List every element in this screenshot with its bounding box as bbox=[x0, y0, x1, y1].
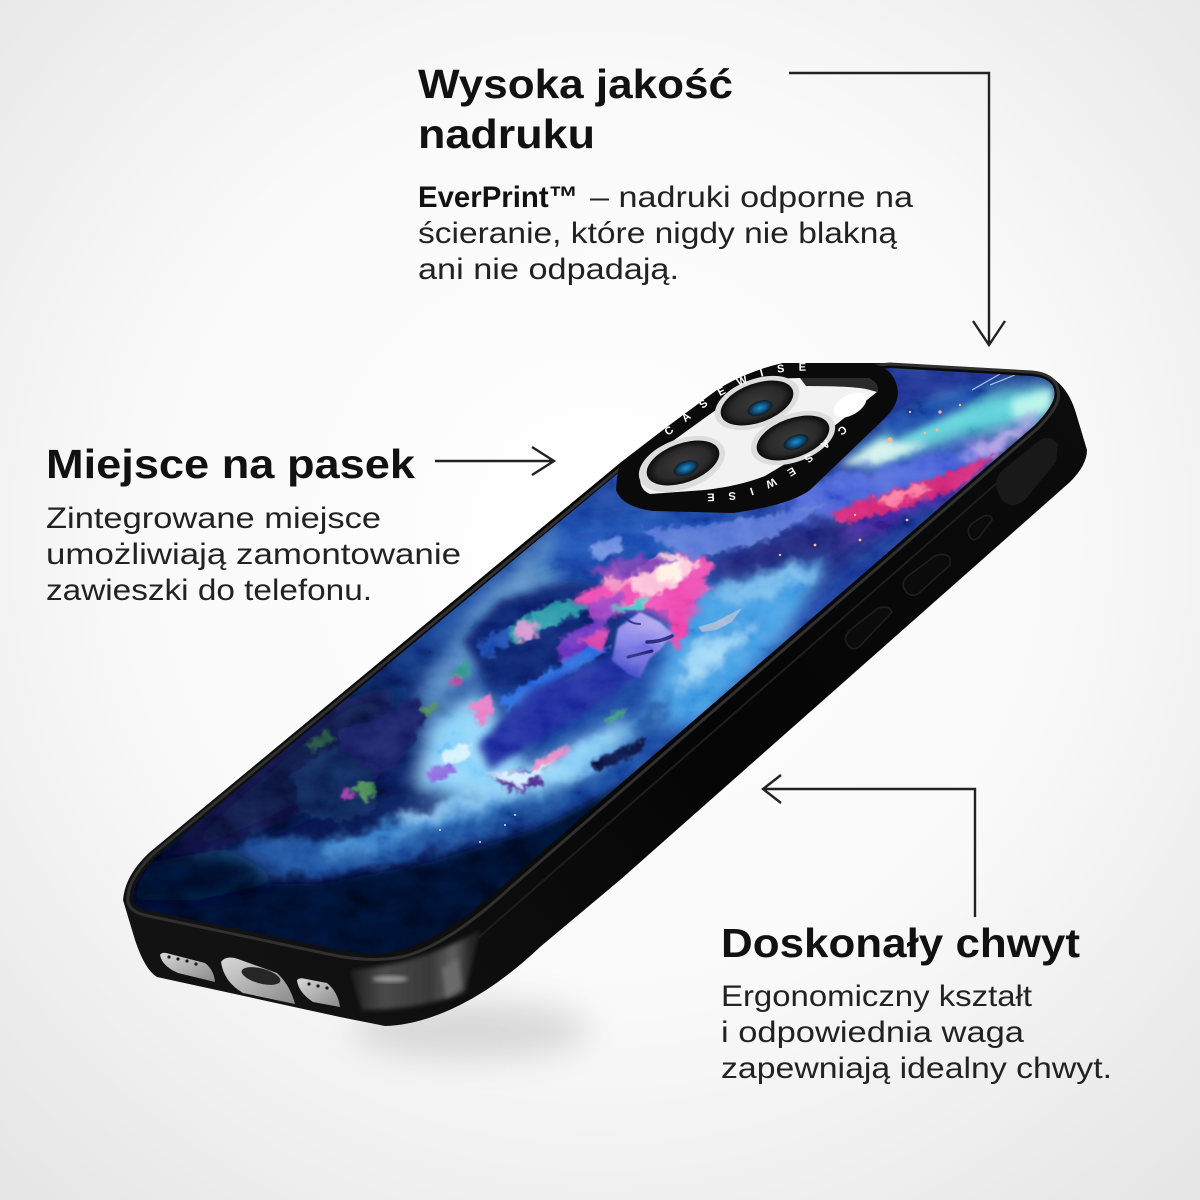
rim lettering: CASEWISE bbox=[665, 363, 806, 434]
rim lettering lower: CASEWISE bbox=[708, 426, 846, 502]
neck and shoulder bbox=[478, 655, 636, 770]
side buttons bbox=[845, 516, 992, 649]
inner top shade bbox=[800, 378, 878, 392]
dark rock formations bbox=[290, 696, 647, 822]
screen rim bbox=[128, 364, 1058, 959]
heading: print quality: nadruku bbox=[418, 111, 595, 157]
dark bottom left corner bbox=[130, 848, 285, 900]
right cloud bank bbox=[670, 560, 825, 705]
heading: print quality: Wysoka jakość bbox=[418, 61, 733, 107]
stars bbox=[779, 404, 961, 556]
lens left bbox=[631, 425, 733, 503]
dark lower sky bbox=[150, 734, 678, 954]
heading: strap slot: Miejsce na pasek bbox=[46, 441, 415, 487]
dark cloud over sky bbox=[880, 380, 1000, 440]
hair bbox=[462, 580, 625, 712]
heading: grip: Doskonały chwyt bbox=[721, 920, 1080, 966]
facial features bbox=[625, 618, 672, 657]
phone case illustration bbox=[123, 362, 1087, 1026]
camera island bbox=[616, 363, 898, 513]
callout: strap slot bbox=[46, 441, 554, 607]
phone shadow bbox=[350, 1000, 590, 1060]
text block: EverPrint description: – nadruki odporne na bbox=[590, 181, 913, 214]
magenta haze in clouds bbox=[425, 692, 568, 788]
case body bbox=[123, 363, 1087, 1026]
lower cloud band bbox=[186, 680, 690, 882]
face bbox=[612, 612, 673, 678]
bottom corner sheen bbox=[350, 930, 480, 1010]
island frame bbox=[616, 363, 898, 513]
texture overlay bbox=[120, 360, 1070, 960]
artwork base bbox=[134, 368, 1054, 894]
right speaker grille bbox=[297, 978, 340, 1007]
lilac clouds under island bbox=[585, 500, 830, 580]
flying whale bbox=[698, 608, 742, 632]
arrow: to case side bbox=[763, 775, 975, 917]
text block: EverPrint description: EverPrint™ bbox=[418, 181, 578, 214]
left speaker grille bbox=[160, 953, 215, 982]
text block: grip description: zapewniają idealny chwyt. bbox=[721, 1052, 1112, 1085]
lens top bbox=[707, 365, 807, 441]
charging port bbox=[221, 958, 295, 1004]
text block: strap slot description bbox=[46, 502, 461, 607]
text block: grip description: i odpowiednia waga bbox=[721, 1016, 1024, 1049]
printed artwork bbox=[132, 368, 1054, 954]
callout: print quality bbox=[418, 61, 1005, 345]
soft colour regions bbox=[145, 372, 1030, 868]
text block: EverPrint description: ścieranie, które nigdy nie blakną bbox=[418, 217, 897, 250]
arrow: to print surface bbox=[789, 73, 1005, 345]
blue violet cloud bank bbox=[780, 412, 1040, 540]
text block: strap slot description: zawieszki do telefonu. bbox=[46, 574, 372, 607]
arrow: to camera island bbox=[435, 447, 554, 475]
text block: strap slot description: umożliwiają zamontowanie bbox=[46, 538, 461, 571]
meteor streaks bbox=[972, 374, 1015, 390]
callout: grip bbox=[721, 775, 1112, 1085]
luminous glow around figure bbox=[415, 690, 640, 800]
text block: grip description: Ergonomiczny kształt bbox=[721, 980, 1033, 1013]
text block: strap slot description: Zintegrowane miejsce bbox=[46, 502, 381, 535]
stray sparkles in lower sky bbox=[439, 814, 516, 843]
plate reflection bbox=[829, 387, 871, 423]
text block: EverPrint description: ani nie odpadają. bbox=[418, 253, 679, 286]
moss on rocks bbox=[305, 660, 629, 802]
text block: grip description bbox=[721, 980, 1112, 1085]
lens right bbox=[743, 400, 843, 476]
strap slot pad bbox=[996, 438, 1058, 505]
text block: EverPrint description bbox=[418, 181, 913, 286]
side contour bbox=[478, 440, 1046, 938]
magenta nebula bbox=[830, 452, 1000, 525]
teal sky bbox=[840, 385, 1052, 465]
inner camera plate bbox=[640, 378, 878, 494]
crown of pink flowers bbox=[572, 550, 716, 650]
